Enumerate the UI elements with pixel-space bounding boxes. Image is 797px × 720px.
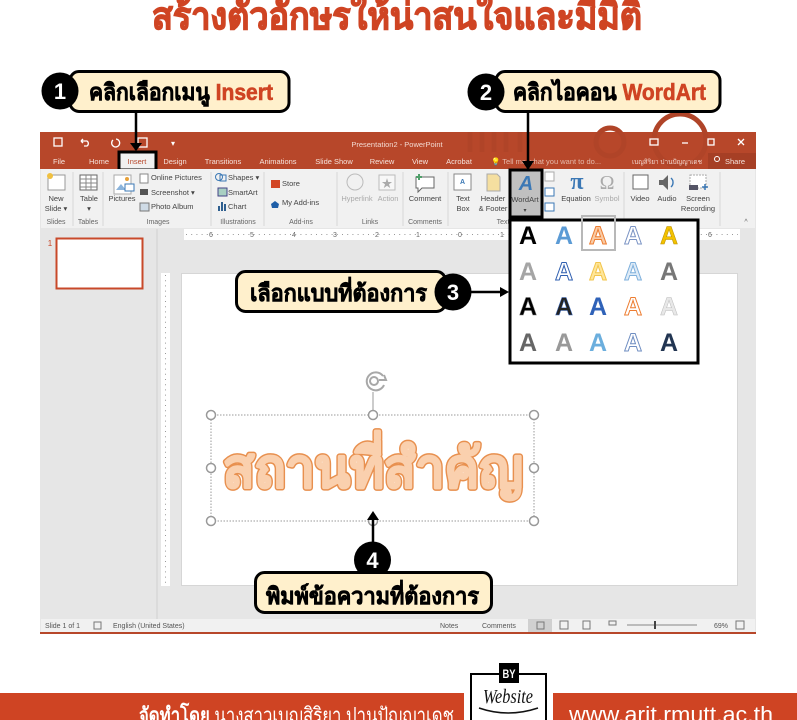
- callout 3: เลือกแบบที่ต้องการ: [250, 276, 428, 306]
- wordart button: ▾: [523, 208, 527, 214]
- ribbon labels: ▾: [87, 204, 91, 213]
- insert tab: [119, 152, 156, 170]
- badge: by website: BY: [502, 667, 516, 681]
- wordart gallery: A: [519, 258, 537, 286]
- wordart gallery: A: [589, 329, 607, 357]
- rotate handle: [367, 372, 386, 390]
- badge: by website: Website: [483, 686, 533, 708]
- title bar: Design: [163, 157, 187, 166]
- wordart gallery: A: [589, 222, 607, 250]
- title bar: View: [412, 157, 429, 166]
- ribbon icons: [47, 169, 708, 211]
- ribbon labels: Shapes ▾: [228, 173, 260, 182]
- ribbon labels: SmartArt: [228, 188, 259, 197]
- status bar: English (United States): [113, 623, 185, 630]
- status bar: Slide 1 of 1: [45, 623, 80, 630]
- wordart gallery: A: [660, 329, 678, 357]
- ribbon labels: [45, 173, 748, 226]
- ruler: 3: [333, 232, 337, 239]
- title bar: Presentation2 - PowerPoint: [351, 140, 444, 149]
- wordart gallery: A: [589, 258, 607, 286]
- ribbon labels: Audio: [657, 194, 677, 203]
- ruler: [161, 229, 740, 586]
- wordart gallery: A: [519, 222, 537, 250]
- status bar: Comments: [482, 623, 516, 630]
- ribbon icons: π: [570, 169, 584, 195]
- slide thumbnail: [48, 238, 142, 288]
- ribbon labels: Store: [282, 179, 300, 188]
- title bar: File: [53, 157, 65, 166]
- ribbon labels: Comment: [409, 194, 442, 203]
- wordart gallery: A: [555, 222, 573, 250]
- ruler: 1: [500, 232, 504, 239]
- footer band left: [0, 693, 464, 720]
- ribbon labels: Slide ▾: [45, 204, 67, 213]
- callout 1: [42, 72, 289, 151]
- wordart gallery: A: [624, 258, 642, 286]
- ruler: 1: [416, 232, 420, 239]
- panel: PowerPoint window: [40, 114, 756, 634]
- wordart sample text: สถานที่สำคัญ: [223, 430, 523, 500]
- slide thumbnail: 1: [48, 239, 53, 248]
- ribbon labels: & Footer: [479, 204, 508, 213]
- ribbon labels: Online Pictures: [151, 173, 202, 182]
- ribbon labels: Images: [147, 219, 170, 226]
- wordart gallery: A: [589, 293, 607, 321]
- wordart button: WordArt: [511, 195, 540, 204]
- ruler: 0: [458, 232, 462, 239]
- ruler: 4: [292, 232, 296, 239]
- title bar: เบญสิริยา ปานปัญญาเดช: [632, 158, 702, 166]
- wordart gallery: A: [624, 222, 642, 250]
- title bar: [40, 114, 756, 169]
- ribbon labels: ^: [744, 219, 748, 226]
- wordart gallery: A: [660, 222, 678, 250]
- wordart gallery: A: [660, 258, 678, 286]
- title bar: Review: [370, 157, 395, 166]
- ribbon labels: Action: [378, 194, 398, 203]
- wordart gallery: A: [519, 329, 537, 357]
- slide canvas: [182, 274, 738, 586]
- ribbon labels: Header: [481, 194, 506, 203]
- title bar: Acrobat: [446, 157, 473, 166]
- ribbon labels: Pictures: [108, 194, 136, 203]
- insert tab: Insert: [128, 157, 147, 166]
- callout 1: คลิกเลือกเมนู Insert: [89, 79, 273, 107]
- wordart gallery: A: [624, 293, 642, 321]
- ribbon labels: New: [48, 194, 64, 203]
- ribbon labels: Links: [362, 219, 379, 226]
- wordart gallery: A: [555, 293, 573, 321]
- ribbon labels: Tables: [78, 219, 99, 226]
- title bar: Home: [89, 157, 109, 166]
- title bar: 💡 Tell me what you want to do...: [491, 157, 601, 166]
- ribbon icons: A: [460, 179, 465, 186]
- ribbon labels: Table: [80, 194, 98, 203]
- title bar: Slide Show: [315, 157, 353, 166]
- ribbon icons: ★: [382, 178, 392, 190]
- wordart gallery: A: [519, 293, 537, 321]
- callout 3: [236, 272, 509, 312]
- ribbon labels: Chart: [228, 202, 247, 211]
- ribbon: [41, 169, 755, 228]
- callout 1: 1: [54, 79, 66, 104]
- ribbon labels: Screenshot ▾: [151, 188, 195, 197]
- ribbon labels: Equation: [561, 194, 591, 203]
- footer band right: [553, 693, 797, 720]
- ribbon labels: Text: [497, 219, 509, 226]
- wordart gallery: [510, 216, 698, 363]
- badge: by website: [471, 663, 546, 720]
- title bar: Transitions: [205, 157, 241, 166]
- ribbon labels: Screen: [686, 194, 710, 203]
- ruler: 6: [209, 232, 213, 239]
- callout 2: 2: [480, 80, 492, 105]
- title bar: Share: [725, 157, 745, 166]
- status bar: [40, 619, 756, 634]
- ribbon labels: Recording: [681, 204, 715, 213]
- ribbon labels: Slides: [46, 219, 66, 226]
- wordart text box: [206, 372, 538, 526]
- ribbon icons: Ω: [600, 172, 614, 194]
- ribbon labels: Add-ins: [289, 219, 313, 226]
- ruler: 5: [250, 232, 254, 239]
- title bar: ▾: [171, 139, 175, 148]
- ruler: 2: [375, 232, 379, 239]
- callout 4: พิมพ์ข้อความที่ต้องการ: [266, 579, 480, 609]
- title bar: Animations: [259, 157, 297, 166]
- callout 4: [256, 511, 492, 612]
- wordart button: A: [518, 173, 533, 195]
- ribbon labels: Hyperlink: [341, 194, 373, 203]
- wordart gallery: A: [660, 293, 678, 321]
- wordart gallery: A: [555, 329, 573, 357]
- ribbon labels: My Add-ins: [282, 198, 319, 207]
- wordart gallery: A: [555, 258, 573, 286]
- callout 2: [468, 72, 720, 170]
- ribbon labels: Photo Album: [151, 202, 194, 211]
- callout 4: 4: [366, 548, 379, 573]
- ribbon labels: Symbol: [594, 194, 620, 203]
- wordart gallery: A: [624, 329, 642, 357]
- ruler: 6: [708, 232, 712, 239]
- wordart sample text: สถานที่สำคัญ: [223, 430, 523, 500]
- ribbon labels: Box: [457, 204, 470, 213]
- ribbon labels: Video: [630, 194, 650, 203]
- wordart button: [510, 170, 542, 217]
- ribbon labels: Comments: [408, 219, 442, 226]
- ribbon labels: Illustrations: [220, 219, 256, 226]
- callout 3: 3: [447, 280, 459, 305]
- ribbon labels: Text: [456, 194, 471, 203]
- callout 2: คลิกไอคอน WordArt: [513, 78, 706, 105]
- status bar: 69%: [714, 623, 728, 630]
- status bar: Notes: [440, 623, 459, 630]
